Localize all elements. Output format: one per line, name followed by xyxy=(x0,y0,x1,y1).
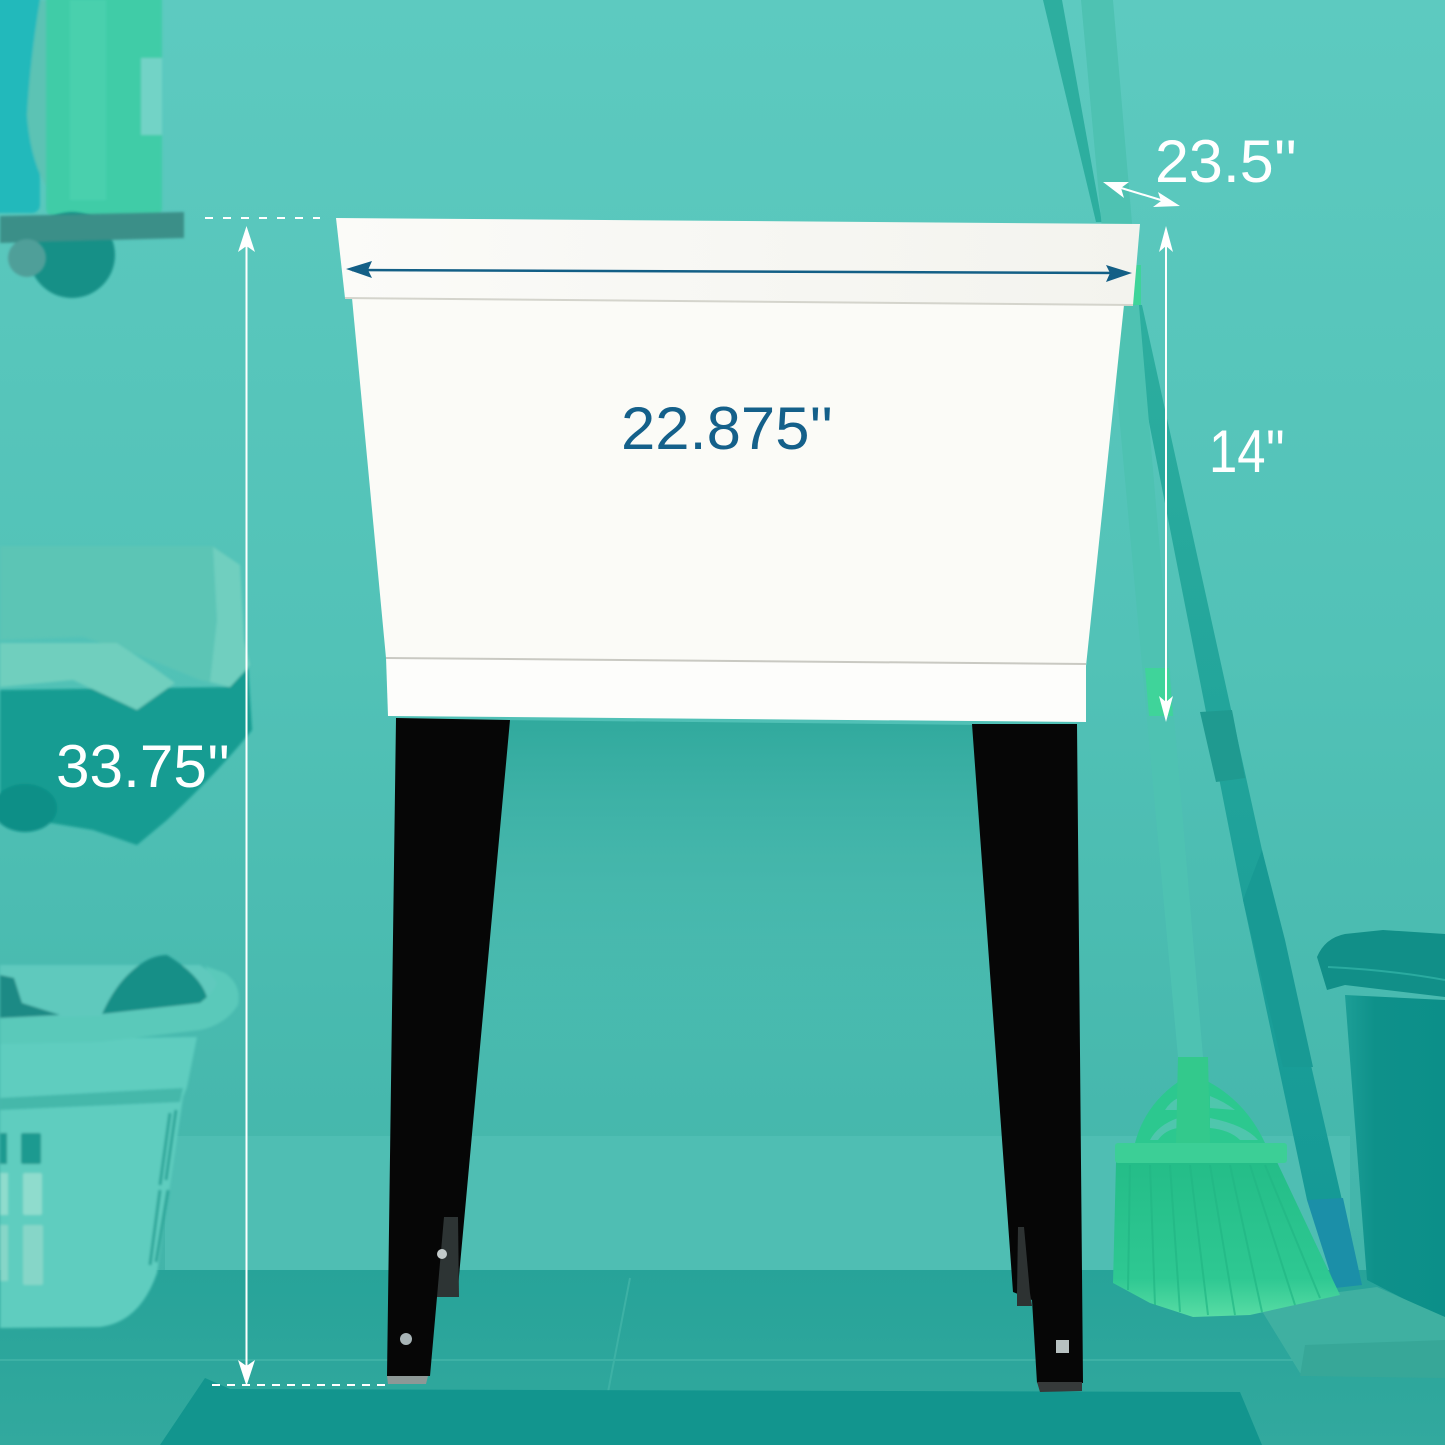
width arrow xyxy=(346,261,1132,282)
stacked towels xyxy=(0,546,252,845)
height label: 33.75'' xyxy=(56,733,230,800)
depth arrow xyxy=(1103,182,1180,207)
tub top rim xyxy=(336,218,1140,305)
height arrow xyxy=(205,218,385,1386)
shelf xyxy=(0,212,184,277)
floor xyxy=(0,1270,1445,1445)
rug xyxy=(160,1378,1262,1445)
baseboard xyxy=(165,1136,1350,1276)
broom bristles xyxy=(1113,1162,1340,1317)
tub bottom band xyxy=(386,657,1086,722)
tub body xyxy=(336,218,1140,722)
tub depth label: 14'' xyxy=(1209,418,1285,485)
depth label: 23.5'' xyxy=(1155,128,1297,195)
bottles on shelf xyxy=(0,0,162,217)
mop head xyxy=(1257,1287,1445,1378)
broom xyxy=(1081,0,1340,1317)
mop handle lower xyxy=(1126,305,1362,1288)
tub depth arrow xyxy=(1159,226,1173,722)
tub shadow on wall xyxy=(470,720,1000,1050)
width label: 22.875'' xyxy=(621,395,833,462)
shelf bracket xyxy=(29,212,115,298)
tub right leg xyxy=(972,724,1083,1392)
laundry basket xyxy=(0,955,239,1328)
mop handle upper xyxy=(1043,0,1102,222)
broom fan xyxy=(1135,1080,1265,1143)
tub left leg xyxy=(387,718,510,1384)
bucket xyxy=(1317,930,1445,1320)
